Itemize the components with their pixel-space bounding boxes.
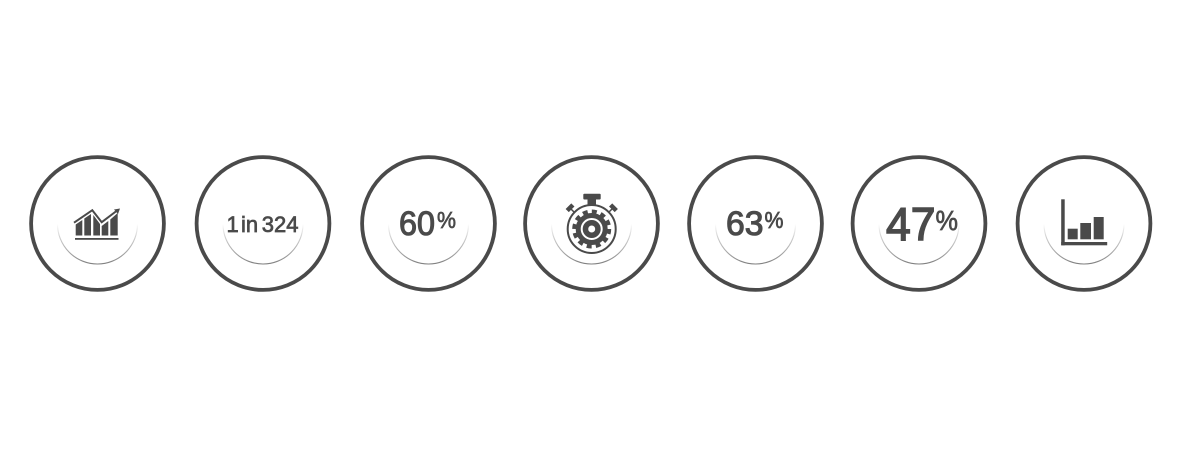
stat: 47%: 47	[886, 198, 936, 250]
stat: 60%	[399, 205, 456, 243]
stat: 63%: 63	[726, 205, 764, 243]
circle 1: line and bar chart icon	[31, 157, 164, 290]
circle 4: stopwatch gear icon	[525, 157, 658, 290]
stat: 60%: %	[437, 207, 456, 233]
circle 6: 47%	[853, 157, 985, 290]
circle 3: 60%	[362, 157, 495, 290]
stat: 1 in 324: 1	[226, 212, 239, 237]
stat: 63%	[726, 205, 784, 243]
icon: bar chart with axes	[1061, 199, 1107, 245]
icon: area trend chart	[74, 208, 120, 240]
circle 7: bar chart icon	[1018, 157, 1150, 290]
stat: 1 in 324: in	[241, 212, 258, 237]
circle 2: 1 in 324	[197, 157, 329, 290]
stat: 60%: 60	[399, 205, 435, 243]
icon: stopwatch with gear	[566, 194, 618, 253]
stat: 63%: %	[764, 207, 784, 233]
circle 5: 63%	[689, 157, 822, 290]
stat: 47%: %	[936, 205, 958, 236]
stat: 1 in 324: 324	[262, 212, 299, 237]
